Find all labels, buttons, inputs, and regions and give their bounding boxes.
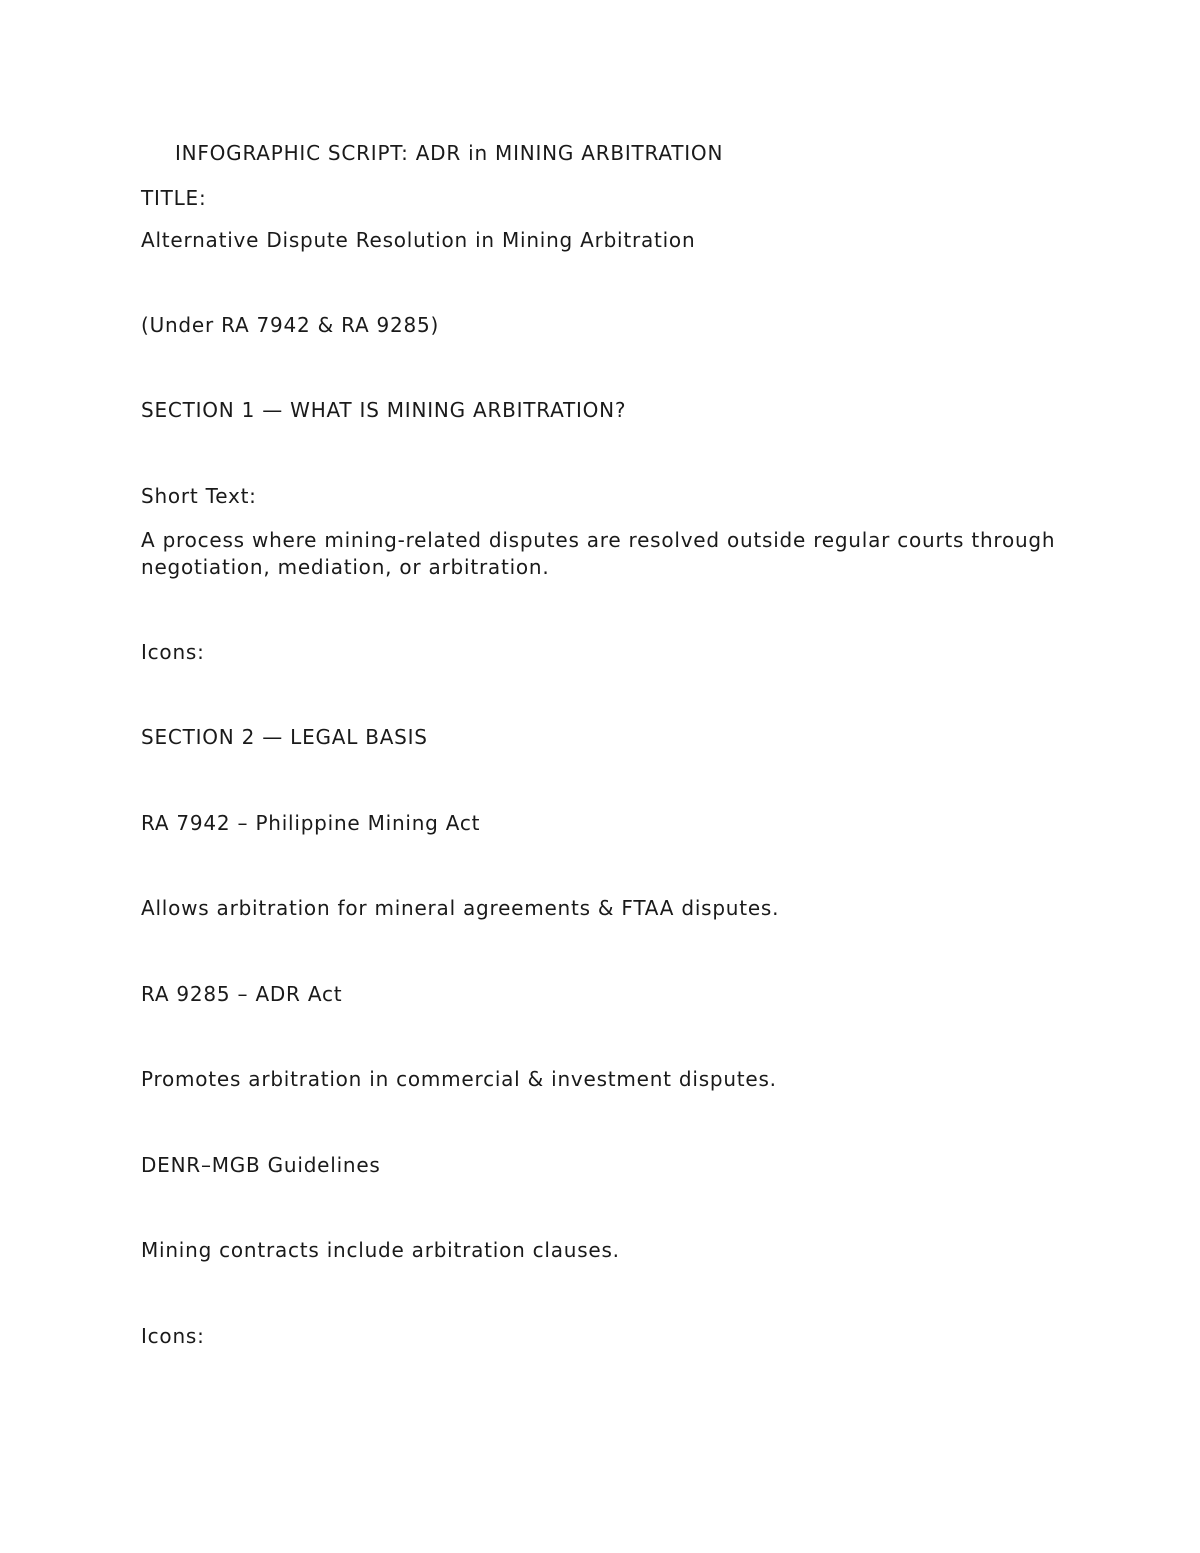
text: subtitle: (Under RA 7942 & RA 9285)	[141, 313, 439, 337]
text: RA 9285: RA 9285 – ADR Act	[141, 982, 342, 1006]
heading: section 1: SECTION 1 — WHAT IS MINING ARBITRATION?	[141, 398, 626, 422]
text: RA 7942: RA 7942 – Philippine Mining Act	[141, 811, 480, 835]
heading: section 2: SECTION 2 — LEGAL BASIS	[141, 725, 428, 749]
text block: definition: negotiation, mediation, or arbitration.	[141, 555, 549, 579]
heading: script title: INFOGRAPHIC SCRIPT: ADR in MINING ARBITRATION	[175, 141, 723, 165]
text: RA 7942 desc: Allows arbitration for mineral agreements & FTAA disputes.	[141, 896, 779, 920]
text block: definition: A process where mining-related disputes are resolved outside regular courts through	[141, 528, 1055, 552]
label: icons 1: Icons:	[141, 640, 205, 664]
label: icons 2: Icons:	[141, 1324, 205, 1348]
text: title: Alternative Dispute Resolution in Mining Arbitration	[141, 228, 695, 252]
text block: definition	[141, 528, 1055, 579]
text: RA 9285 desc: Promotes arbitration in commercial & investment disputes.	[141, 1067, 777, 1091]
label: short text: Short Text:	[141, 484, 257, 508]
text: DENR desc: Mining contracts include arbitration clauses.	[141, 1238, 620, 1262]
text: DENR-MGB: DENR–MGB Guidelines	[141, 1153, 381, 1177]
label: title: TITLE:	[141, 186, 206, 210]
